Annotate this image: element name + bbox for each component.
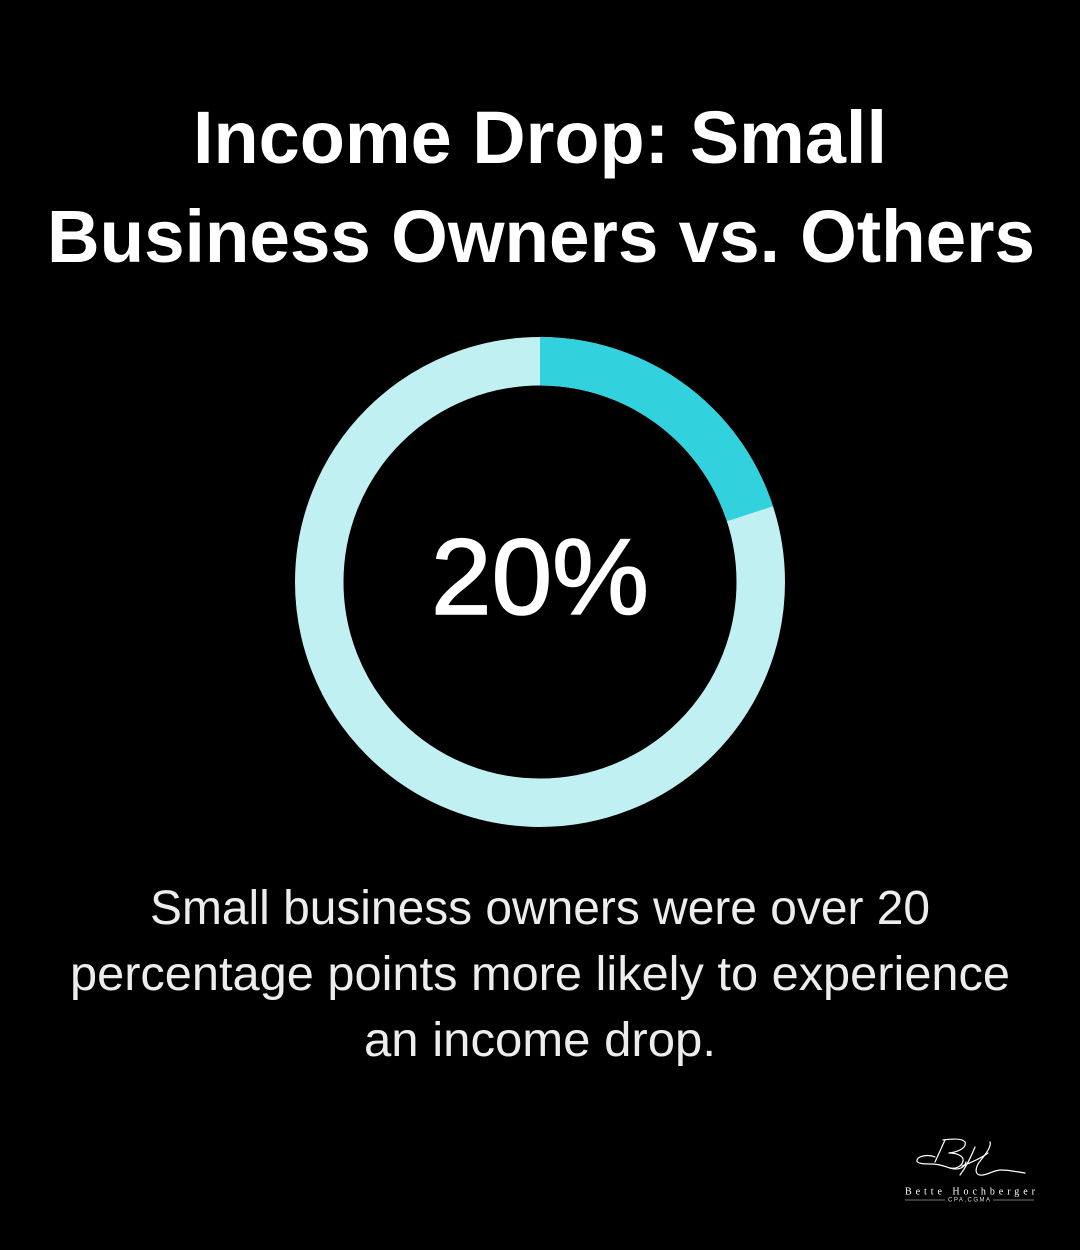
title: Income Drop: Small <box>193 96 887 179</box>
logo name: Bette Hochberger <box>905 1186 1036 1198</box>
description text: percentage points more likely to experience <box>70 948 1010 1001</box>
logo credentials: CPA,CGMA <box>948 1198 990 1204</box>
donut chart: 20% <box>319 361 761 803</box>
description text <box>70 882 1010 1067</box>
title: Business Owners vs. Others <box>47 195 1035 278</box>
signature flourish <box>917 1139 1025 1175</box>
description text: Small business owners were over 20 <box>150 882 930 935</box>
description text: an income drop. <box>364 1014 716 1067</box>
donut value: 20% <box>431 516 649 637</box>
logo: Bette Hochberger signature <box>905 1139 1036 1204</box>
title <box>47 96 1035 278</box>
